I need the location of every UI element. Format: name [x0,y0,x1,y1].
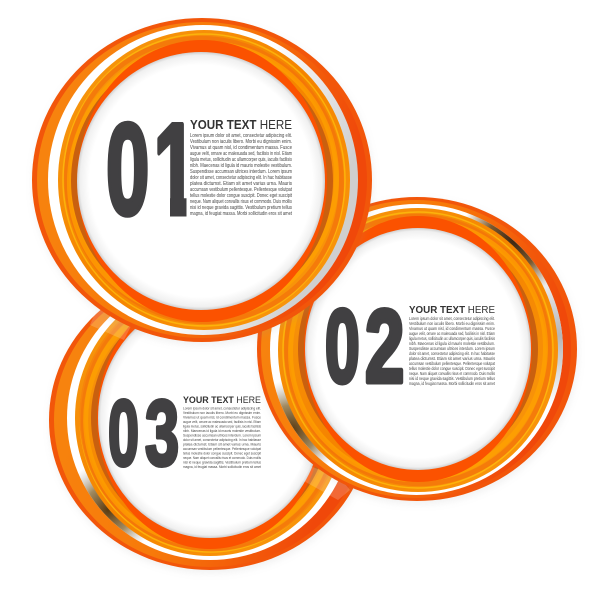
number 03: 3 [145,381,179,485]
body text 1: Lorem ipsum dolor sit amet, consectetur adipiscing elit. [190,133,292,139]
body text 3: augue velit, ornare ac malesuada sed, facilisis in nisl. Etiam [183,420,261,424]
body text 2: augue velit, ornare ac malesuada sed, facilisis in nisl. Etiam [409,331,495,336]
body text 1: neque. Nam aliquet convallis risus et commodo. Duis mollis [190,199,292,205]
body text 1: tellus molestie dolor congue suscipit. Donec eget suscipit [190,193,292,199]
body text 2: nisi id neque gravida sagittis. Vestibulum pretium tellus [409,376,495,381]
number 02: 2 [365,287,404,404]
body text 1: Vestibulum non iaculis libero. Morbi eu dignissim enim. [190,139,292,145]
body text 1: Vivamus ut quam nisl, id condimentum massa. Fusce [190,145,292,151]
heading 1: YOUR TEXT HERE [190,118,292,132]
body text 2: platea dictumst. Etiam sit amet varius urna. Mauris [409,356,495,361]
heading 2: YOUR TEXT HERE [409,304,495,316]
body text 1: nibh. Maecenas id ligula id mauris molestie vestibulum. [190,163,292,169]
body text 2: magna, id feugiat massa. Morbi sollicitudin eros sit amet [409,381,496,386]
body text 1: magna, id feugiat massa. Morbi sollicitudin eros sit amet [190,211,292,217]
body text 2: ligula metus, sollicitudin ac ullamcorper quis, iaculis facilisis [409,336,495,341]
body text 3: neque. Nam aliquet convallis risus et commodo. Duis mollis [183,456,261,460]
body text 2 [409,316,496,386]
body text 3: Vestibulum non iaculis libero. Morbi eu dignissim enim. [183,411,261,415]
body text 2: Vestibulum non iaculis libero. Morbi eu dignissim enim. [409,321,495,326]
body text 1: Suspendisse accumsan ultrices interdum. Lorem ipsum [190,169,292,175]
ring 2 [249,180,587,520]
body text 1: ligula metus, sollicitudin ac ullamcorper quis, iaculis facilisis [190,157,292,163]
body text 2: accumsan vestibulum pellentesque. Pellentesque volutpat [409,361,496,366]
number 02 [325,287,404,405]
body text 3: platea dictumst. Etiam sit amet varius urna. Mauris [183,442,261,446]
number 01: 0 [106,96,149,242]
body text 3: Suspendisse accumsan ultrices interdum. Lorem ipsum [183,434,261,438]
ring 1 [28,3,378,357]
body text 2: nibh. Maecenas id ligula id mauris molestie vestibulum. [409,341,495,346]
heading 3: YOUR TEXT HERE [183,395,261,406]
body text 3: accumsan vestibulum pellentesque. Pellentesque volutpat [183,447,262,451]
body text 2: Vivamus ut quam nisl, id condimentum massa. Fusce [409,326,496,331]
number 03 [108,381,179,486]
body text 2: tellus molestie dolor congue suscipit. Donec eget suscipit [409,366,496,371]
body text 2: neque. Nam aliquet convallis risus et commodo. Duis mollis [409,371,495,376]
body text 3: Lorem ipsum dolor sit amet, consectetur adipiscing elit. [183,406,261,410]
translucent overlap: ring 3 right [302,466,350,500]
translucent overlap: ring 3 top [90,308,133,340]
body text 1 [190,133,292,217]
body text 2: dolor sit amet, consectetur adipiscing elit. In hac habitasse [409,351,496,356]
body text 1: nisi id neque gravida sagittis. Vestibulum pretium tellus [190,205,292,211]
number 02: 0 [325,289,360,405]
body text 3: nisi id neque gravida sagittis. Vestibulum pretium tellus [183,460,261,464]
body text 3: tellus molestie dolor congue suscipit. Donec eget suscipit [183,452,262,456]
number 01 [108,120,186,218]
body text 1: dolor sit amet, consectetur adipiscing elit. In hac habitasse [190,175,292,181]
body text 3: ligula metus, sollicitudin ac ullamcorper quis, iaculis facilisis [183,424,261,428]
body text 2: Lorem ipsum dolor sit amet, consectetur adipiscing elit. [409,316,495,321]
body text 3: nibh. Maecenas id ligula id mauris molestie vestibulum. [183,429,261,433]
number 03: 0 [108,383,139,486]
body text 3: magna, id feugiat massa. Morbi sollicitudin eros sit amet [183,465,262,469]
body text 3: Vivamus ut quam nisl, id condimentum massa. Fusce [183,416,261,420]
body text 1: augue velit, ornare ac malesuada sed, facilisis in nisl. Etiam [190,151,292,157]
ring 3 [49,256,372,580]
body text 1: platea dictumst. Etiam sit amet varius urna. Mauris [190,181,292,187]
body text 2: Suspendisse accumsan ultrices interdum. Lorem ipsum [409,346,495,351]
body text 1: accumsan vestibulum pellentesque. Pellentesque volutpat [190,187,292,193]
number 01: 1 [154,96,197,242]
body text 3 [183,406,262,469]
body text 3: dolor sit amet, consectetur adipiscing elit. In hac habitasse [183,438,261,442]
